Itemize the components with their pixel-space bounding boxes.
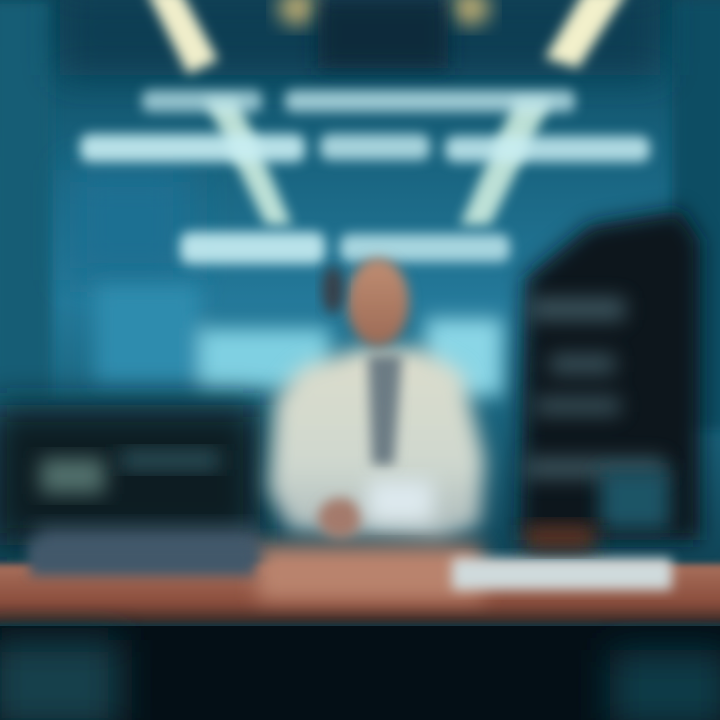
dark floor: [0, 626, 720, 720]
person: [268, 258, 485, 540]
ceiling lights: [146, 0, 628, 74]
tie: [368, 355, 402, 465]
bright window glow: [95, 285, 503, 396]
jacket: [268, 348, 485, 540]
dark equipment cabinet: [520, 210, 700, 540]
hair: [322, 266, 344, 314]
papers on desk: [452, 525, 672, 590]
hands and papers: [318, 498, 362, 538]
light beams: [205, 100, 552, 225]
blurred headline lines: [80, 90, 650, 264]
desk: [0, 542, 720, 624]
dark machinery at left: [0, 405, 260, 574]
head: [347, 258, 409, 346]
